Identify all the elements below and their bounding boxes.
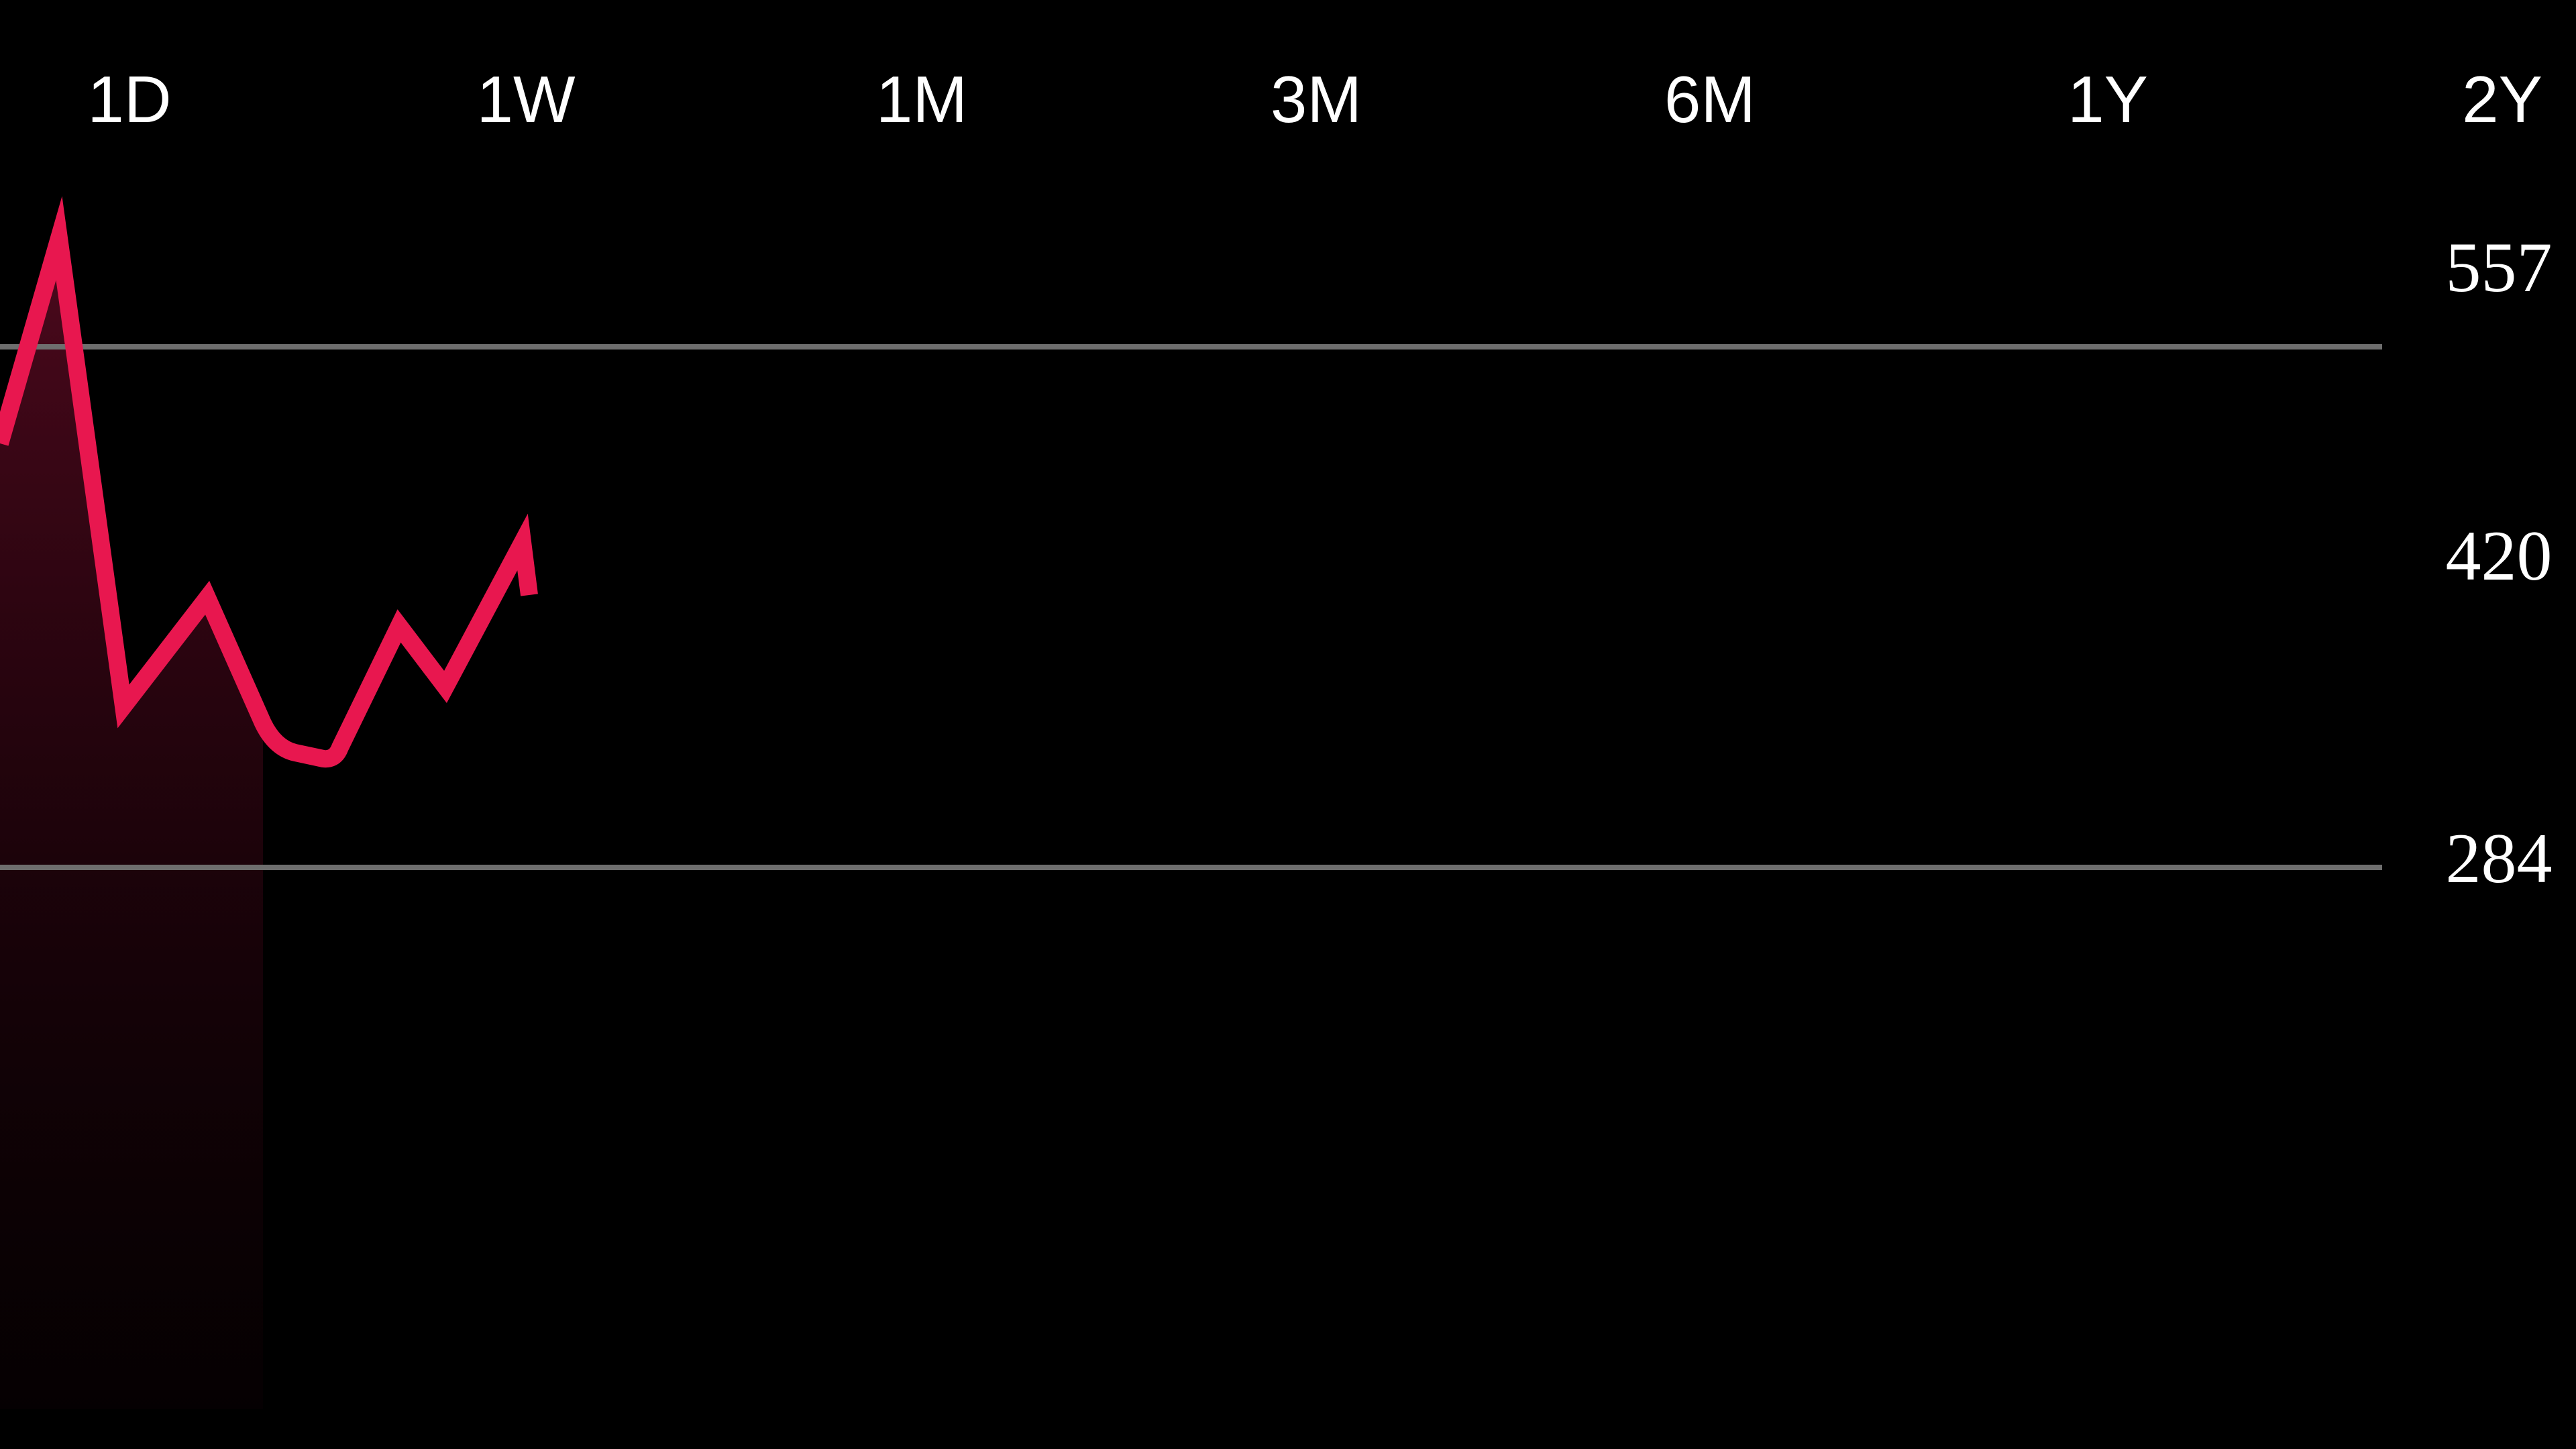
gridline 557 — [0, 344, 2382, 350]
time range labels: 6M — [1664, 62, 1756, 136]
gridline 284 — [0, 865, 2382, 870]
y axis labels: 557 — [2446, 228, 2552, 307]
price line — [0, 238, 529, 759]
time range labels — [87, 62, 2542, 136]
time range labels: 3M — [1271, 62, 1362, 136]
time range labels: 1D — [87, 62, 172, 136]
time range labels: 2Y — [2462, 62, 2542, 136]
area fill — [0, 238, 263, 1409]
time range labels: 1W — [476, 62, 576, 136]
y axis labels: 420 — [2446, 517, 2552, 595]
time range labels: 1Y — [2068, 62, 2148, 136]
y axis labels — [2446, 228, 2552, 898]
y axis labels: 284 — [2446, 819, 2552, 898]
time range labels: 1M — [876, 62, 967, 136]
